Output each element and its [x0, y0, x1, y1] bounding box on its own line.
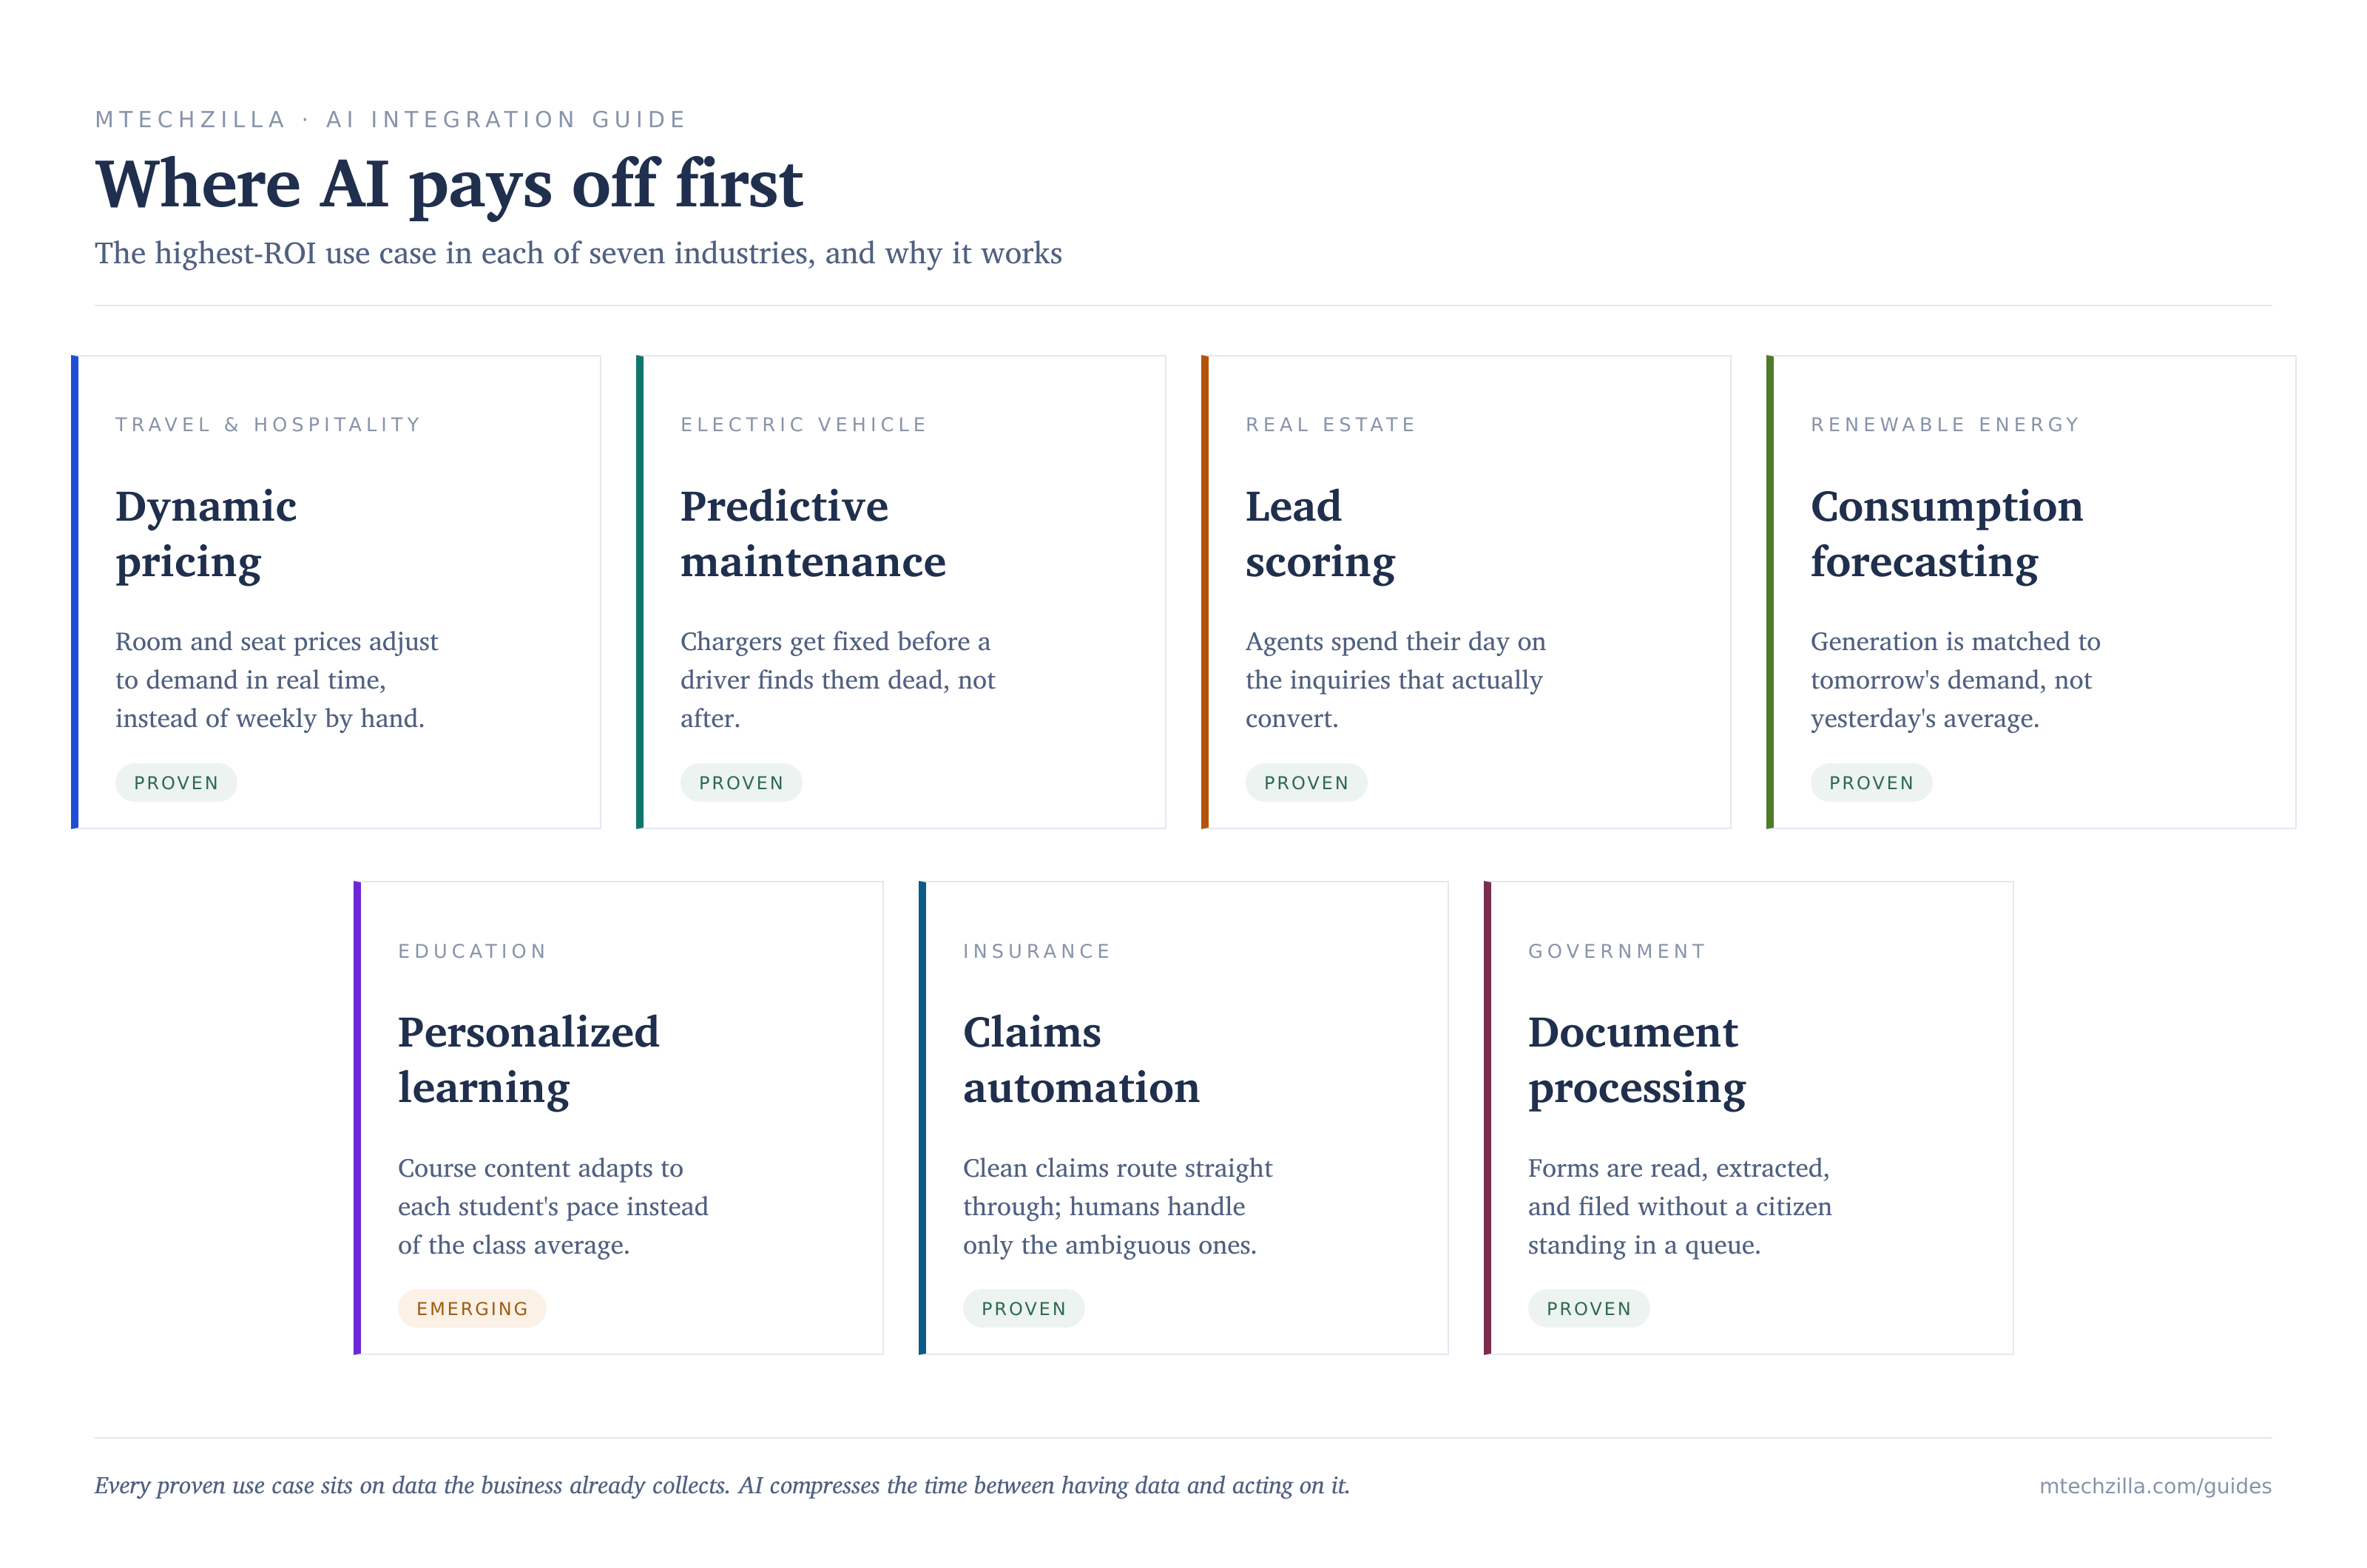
description	[681, 620, 996, 739]
status badge	[963, 1289, 1085, 1328]
status badge: PROVEN	[1547, 1299, 1633, 1319]
use case heading: Predictive	[681, 469, 888, 540]
panel: insurance	[919, 881, 1449, 1355]
use case heading: automation	[963, 1050, 1201, 1121]
description: to demand in real time,	[115, 658, 387, 700]
category label: TRAVEL & HOSPITALITY	[115, 414, 423, 436]
panel: education	[354, 881, 884, 1355]
status badge: PROVEN	[1829, 773, 1916, 794]
use case heading	[681, 469, 946, 595]
description: driver finds them dead, not	[681, 658, 996, 700]
description: Agents spend their day on	[1246, 620, 1547, 662]
description	[398, 1146, 709, 1265]
use case heading: Claims	[963, 995, 1101, 1066]
description	[1246, 620, 1547, 739]
title: Where AI pays off first	[95, 126, 803, 237]
footer note: Every proven use case sits on data the business already collects. AI compresses the time between having data and acting on it.	[95, 1465, 1352, 1504]
description: tomorrow's demand, not	[1811, 658, 2093, 700]
panel: travel and hospitality	[71, 355, 601, 829]
panel: real estate	[1201, 355, 1732, 829]
use case heading: scoring	[1246, 524, 1396, 595]
category label: ELECTRIC VEHICLE	[681, 414, 930, 436]
description: Forms are read, extracted,	[1528, 1146, 1830, 1189]
use case heading	[1246, 469, 1396, 595]
use case heading: forecasting	[1811, 524, 2039, 595]
category label: REAL ESTATE	[1246, 414, 1419, 436]
description	[1528, 1146, 1832, 1265]
description	[963, 1146, 1273, 1265]
use case heading: Lead	[1246, 469, 1343, 540]
description: Chargers get fixed before a	[681, 620, 991, 662]
use case heading: Consumption	[1811, 469, 2084, 540]
description: Room and seat prices adjust	[115, 620, 439, 662]
use case heading: processing	[1528, 1050, 1746, 1121]
panel: renewable energy	[1766, 355, 2297, 829]
description: Generation is matched to	[1811, 620, 2101, 662]
description: instead of weekly by hand.	[115, 697, 425, 739]
footer source link: mtechzilla.com/guides	[2039, 1474, 2272, 1498]
use case heading: Dynamic	[115, 469, 297, 540]
eyebrow: MTECHZILLA · AI INTEGRATION GUIDE	[95, 107, 689, 133]
status badge: EMERGING	[416, 1299, 530, 1319]
status badge	[1246, 763, 1368, 802]
use case heading: learning	[398, 1050, 570, 1121]
status badge: PROVEN	[1264, 773, 1351, 794]
category label: GOVERNMENT	[1528, 941, 1709, 963]
status badge: PROVEN	[134, 773, 220, 794]
description: convert.	[1246, 697, 1340, 739]
use case heading: Document	[1528, 995, 1738, 1066]
panel: government	[1484, 881, 2014, 1355]
use case heading	[1528, 995, 1746, 1121]
status badge	[1811, 763, 1933, 802]
use case heading	[115, 469, 297, 595]
description: Course content adapts to	[398, 1146, 683, 1189]
use case heading	[1811, 469, 2084, 595]
use case heading: Personalized	[398, 995, 661, 1066]
description: Clean claims route straight	[963, 1146, 1273, 1189]
subtitle: The highest-ROI use case in each of seven industries, and why it works	[95, 227, 1062, 277]
status badge: PROVEN	[699, 773, 786, 794]
description	[115, 620, 439, 739]
description: only the ambiguous ones.	[963, 1223, 1257, 1265]
description: after.	[681, 697, 741, 739]
description: through; humans handle	[963, 1185, 1246, 1227]
category label: EDUCATION	[398, 941, 550, 963]
use case heading: maintenance	[681, 524, 946, 595]
description	[1811, 620, 2101, 739]
description: each student's pace instead	[398, 1185, 709, 1227]
status badge	[115, 763, 237, 802]
category label: INSURANCE	[963, 941, 1114, 963]
panel: electric vehicle	[636, 355, 1166, 829]
status badge	[681, 763, 803, 802]
description: and filed without a citizen	[1528, 1185, 1832, 1227]
use case heading: pricing	[115, 524, 262, 595]
description: the inquiries that actually	[1246, 658, 1543, 700]
description: standing in a queue.	[1528, 1223, 1762, 1265]
use case heading	[398, 995, 661, 1121]
category label: RENEWABLE ENERGY	[1811, 414, 2082, 436]
status badge	[1528, 1289, 1650, 1328]
description: of the class average.	[398, 1223, 631, 1265]
status badge	[398, 1289, 547, 1328]
status badge: PROVEN	[982, 1299, 1068, 1319]
description: yesterday's average.	[1811, 697, 2041, 739]
use case heading	[963, 995, 1201, 1121]
